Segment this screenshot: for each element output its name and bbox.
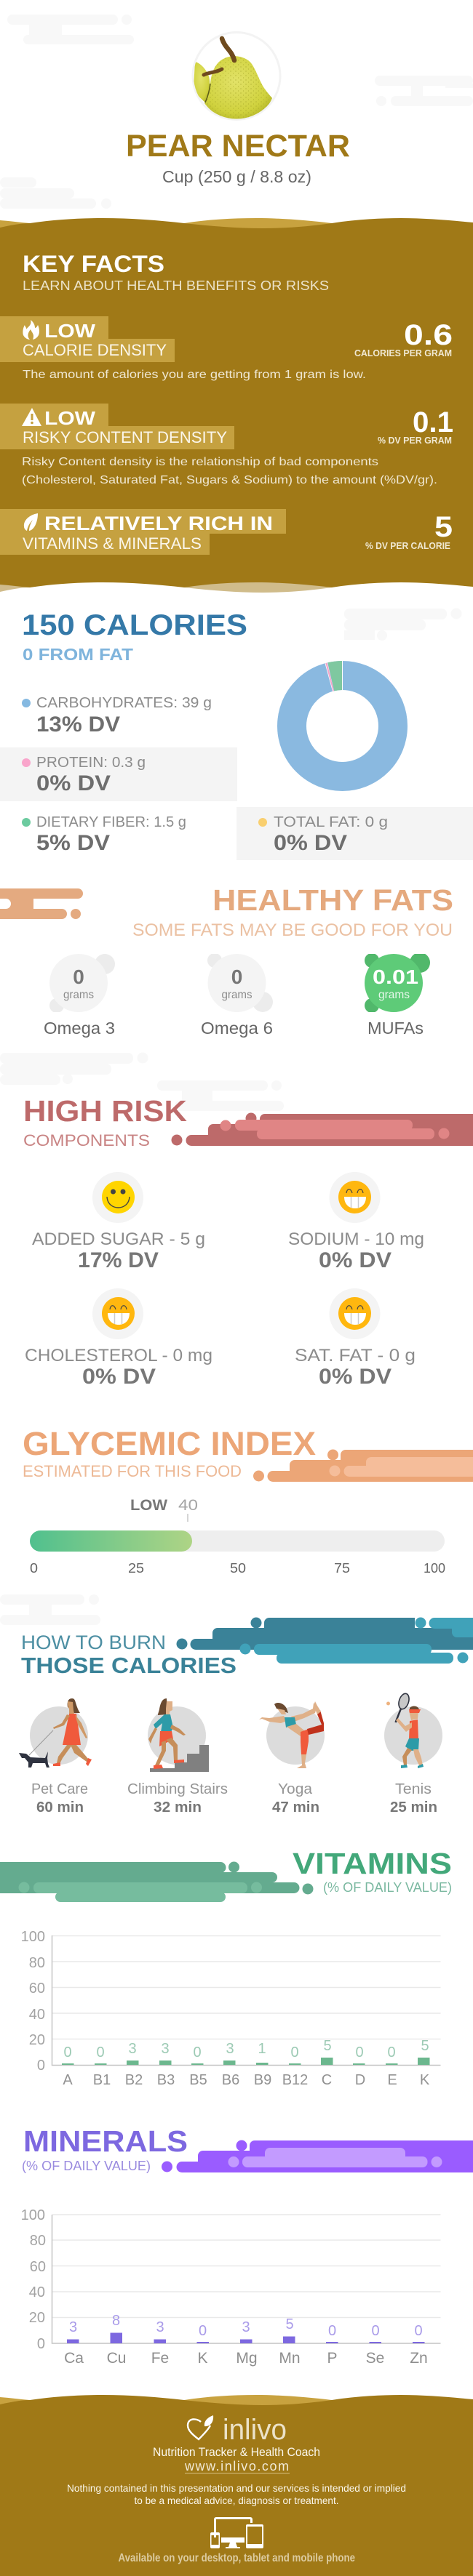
heading line 1: HOW TO BURN	[21, 1632, 166, 1653]
item: carbohydrates: CARBOHYDRATES: 39 g	[36, 695, 212, 711]
bar chart: minerals: Se	[366, 2350, 384, 2367]
bar chart: minerals: Ca	[64, 2350, 84, 2367]
bar chart: minerals: K	[197, 2350, 208, 2367]
panel: high risk components	[23, 1094, 473, 1389]
bar chart: vitamins: K	[420, 2072, 430, 2088]
food photo: pear	[193, 32, 280, 119]
heading line 2: THOSE CALORIES	[21, 1653, 236, 1678]
gauge: low 40	[30, 1497, 445, 1576]
item: omega 6	[201, 953, 273, 1038]
bar chart: vitamins: B3	[157, 2072, 175, 2088]
item: mufas: 0.01	[373, 966, 418, 988]
item: saturated fat	[295, 1288, 416, 1389]
tagline: Nutrition Tracker & Health Coach	[153, 2445, 320, 2459]
item: protein: 0% DV	[36, 771, 111, 795]
value: 0.6 calories per gram: CALORIES PER GRAM	[354, 348, 452, 358]
ornament: red bars	[172, 1112, 473, 1146]
panel: calories	[0, 609, 473, 860]
subheading: (% OF DAILY VALUE)	[22, 2159, 151, 2173]
title: PEAR NECTAR	[126, 129, 350, 164]
donut chart	[292, 661, 393, 777]
fact: calorie density	[0, 316, 453, 381]
bar chart: minerals: P	[327, 2350, 338, 2367]
bar chart: minerals: Mg	[236, 2350, 258, 2367]
fact: vitamins and minerals	[0, 509, 453, 555]
label: low: LOW	[44, 320, 96, 342]
item: omega 6: Omega 6	[201, 1019, 273, 1038]
disclaimer: to be a medical advice, diagnosis or treatment.	[134, 2495, 339, 2506]
bar chart: minerals: Cu	[107, 2350, 126, 2367]
activity: tennis: 25 min	[390, 1799, 437, 1815]
item: saturated fat: SAT. FAT - 0 g	[295, 1346, 416, 1365]
item: carbohydrates	[22, 695, 212, 737]
item: omega 6: 0	[231, 966, 242, 988]
item: added sugar: 17% DV	[78, 1248, 159, 1272]
item: added sugar	[32, 1172, 205, 1272]
bar chart: vitamins: B2	[125, 2072, 143, 2088]
bar chart: minerals: Mn	[279, 2350, 301, 2367]
label: vitamins and minerals: VITAMINS & MINERALS	[23, 534, 202, 553]
subheading: SOME FATS MAY BE GOOD FOR YOU	[132, 920, 453, 940]
heading: healthy fats: HEALTHY FATS	[212, 883, 453, 917]
bar chart: minerals: 0	[371, 2323, 380, 2339]
gauge: low 40: 50	[230, 1561, 246, 1576]
website link: www.inlivo.com	[184, 2459, 289, 2473]
bar chart: vitamins: B6	[222, 2072, 239, 2088]
bar chart: minerals: 3	[69, 2319, 77, 2335]
icon: smile emoji	[102, 1181, 135, 1213]
bar chart: vitamins: 40	[29, 2007, 45, 2023]
logo: inlivo	[188, 2414, 287, 2446]
item: dietary fiber	[22, 814, 186, 855]
gauge: low 40: 0	[30, 1561, 38, 1576]
activity: climbing stairs	[127, 1698, 228, 1815]
label: risky content density: RISKY CONTENT DENSITY	[23, 428, 227, 446]
value: 0.6 calories per gram: 0.6	[404, 319, 453, 351]
icon: warning	[22, 408, 41, 426]
item: omega 3	[44, 954, 115, 1038]
value: 0.1 percent dv per gram: % DV PER GRAM	[378, 435, 452, 446]
heading: key facts: KEY FACTS	[23, 251, 164, 277]
item: omega 6: grams	[221, 989, 252, 1001]
bar chart: vitamins: 20	[29, 2032, 45, 2048]
gauge: low 40: 25	[128, 1561, 144, 1576]
item: protein: PROTEIN: 0.3 g	[36, 755, 146, 771]
gauge: low 40: LOW	[130, 1497, 167, 1514]
activity: pet care: Pet Care	[31, 1781, 88, 1797]
fact: risky content density	[0, 404, 453, 486]
bar chart: minerals: 60	[30, 2259, 46, 2275]
value: 0.1 percent dv per gram	[378, 406, 453, 446]
serving size: Cup (250 g / 8.8 oz)	[162, 167, 311, 186]
disclaimer	[67, 2482, 406, 2506]
activity: climbing stairs: Climbing Stairs	[127, 1781, 228, 1797]
icon: woman in yoga pose	[259, 1701, 324, 1768]
bar chart: vitamins: D	[355, 2072, 365, 2088]
bar chart: vitamins: 0	[355, 2045, 364, 2061]
bar chart: minerals: 0	[199, 2323, 207, 2339]
bar chart: minerals	[21, 2207, 441, 2367]
bar chart: minerals: 0	[37, 2336, 45, 2352]
ornament: orange bars	[0, 888, 83, 919]
bar chart: minerals: 20	[29, 2310, 45, 2326]
description: The amount of calories you are getting from 1 gram is low.	[23, 369, 366, 381]
item: protein	[22, 755, 146, 795]
item: omega 3: Omega 3	[44, 1019, 115, 1038]
bar chart: vitamins: B5	[189, 2072, 207, 2088]
bar chart: minerals: 5	[285, 2316, 294, 2332]
bar chart: vitamins: 80	[29, 1955, 45, 1971]
bar chart: vitamins: 5	[323, 2038, 332, 2054]
item: cholesterol: 0% DV	[82, 1365, 156, 1389]
icon: devices	[210, 2517, 263, 2548]
ornament: green bars	[0, 1861, 313, 1902]
description	[22, 456, 437, 486]
item: sodium: 0% DV	[319, 1248, 391, 1272]
row backgrounds	[0, 747, 473, 860]
bar chart: vitamins: 3	[226, 2041, 234, 2057]
heading: 150 calories: 150 CALORIES	[22, 609, 247, 641]
bar chart: minerals: Fe	[151, 2350, 169, 2367]
activity: yoga	[259, 1701, 325, 1815]
item: carbohydrates: 13% DV	[36, 713, 120, 737]
activity: yoga: Yoga	[278, 1781, 313, 1797]
disclaimer: Nothing contained in this presentation and our services is intended or implied	[67, 2482, 406, 2494]
panel: glycemic index	[23, 1425, 473, 1576]
panel: how to burn those calories	[19, 1617, 473, 1815]
heading: glycemic index: GLYCEMIC INDEX	[23, 1425, 316, 1462]
item: mufas: grams	[378, 989, 410, 1001]
item: mufas	[365, 952, 430, 1038]
value: 5 percent dv per calorie	[365, 511, 453, 551]
bar chart: minerals: 0	[328, 2323, 336, 2339]
icon: grin emoji	[102, 1297, 135, 1330]
panel: footer	[0, 2395, 473, 2576]
gauge: low 40: 75	[334, 1561, 350, 1576]
bar chart: minerals: 100	[21, 2207, 45, 2223]
bar chart: minerals: 8	[112, 2313, 120, 2329]
bar chart: minerals: 3	[156, 2319, 164, 2335]
bar chart: vitamins: 3	[161, 2041, 170, 2057]
description: Risky Content density is the relationship of bad components	[22, 456, 378, 468]
ornament: purple bars	[162, 2140, 473, 2172]
bar chart: vitamins: B9	[254, 2072, 271, 2088]
item: omega 3: grams	[63, 989, 94, 1001]
subheading: components: COMPONENTS	[23, 1131, 150, 1149]
activity: tennis: Tenis	[395, 1781, 432, 1797]
bar chart: vitamins: C	[322, 2072, 332, 2088]
item: total fat: 0% DV	[274, 831, 347, 855]
bar chart: vitamins: 100	[21, 1929, 45, 1945]
heading: high risk: HIGH RISK	[23, 1094, 187, 1128]
item: added sugar: ADDED SUGAR - 5 g	[32, 1229, 205, 1249]
item: total fat: TOTAL FAT: 0 g	[274, 814, 388, 830]
item: sodium: SODIUM - 10 mg	[288, 1229, 424, 1249]
icon: tennis player	[386, 1693, 424, 1768]
bar chart: vitamins: 0	[96, 2045, 105, 2061]
icon: flame	[23, 320, 39, 340]
panel: vitamins	[0, 1847, 452, 2088]
item: total fat	[258, 814, 388, 855]
subheading: from fat: 0 FROM FAT	[23, 645, 133, 664]
activity: yoga: 47 min	[272, 1799, 319, 1815]
heading: vitamins: VITAMINS	[293, 1847, 452, 1880]
item: cholesterol: CHOLESTEROL - 0 mg	[25, 1346, 212, 1365]
icon: woman climbing stairs	[148, 1698, 209, 1772]
activity: pet care: 60 min	[36, 1799, 84, 1815]
item: omega 3: 0	[73, 966, 84, 988]
bar chart: minerals: 80	[30, 2233, 46, 2249]
item: dietary fiber: 5% DV	[36, 831, 110, 855]
panel: minerals	[21, 2124, 473, 2367]
label: low: LOW	[44, 407, 96, 429]
subheading: (% OF DAILY VALUE)	[323, 1880, 452, 1895]
bar chart: vitamins: 1	[258, 2041, 266, 2057]
label: relatively rich in: RELATIVELY RICH IN	[44, 513, 273, 534]
icon: grin emoji	[338, 1181, 371, 1213]
icon: leaf	[24, 513, 38, 531]
panel: healthy fats	[0, 883, 453, 1038]
ornament: orange bars	[253, 1450, 473, 1482]
bar chart: vitamins: 0	[290, 2045, 299, 2061]
description: (Cholesterol, Saturated Fat, Sugars & Sodium) to the amount (%DV/gr).	[22, 474, 437, 486]
bar chart: vitamins: 0	[37, 2058, 45, 2074]
activity: pet care	[19, 1698, 92, 1815]
bar chart: minerals: 0	[414, 2323, 423, 2339]
heading: minerals: MINERALS	[23, 2124, 188, 2158]
gauge: low 40: 100	[424, 1561, 445, 1576]
bar chart: vitamins: 60	[29, 1981, 45, 1997]
bar chart: vitamins: B1	[93, 2072, 111, 2088]
icon: grin emoji	[338, 1297, 371, 1330]
activity: climbing stairs: 32 min	[154, 1799, 202, 1815]
bar chart: minerals: 40	[29, 2284, 45, 2300]
bar chart: vitamins	[21, 1929, 441, 2088]
value: 5 percent dv per calorie: 5	[434, 511, 453, 543]
bar chart: vitamins: E	[387, 2072, 397, 2088]
background cloud shapes	[0, 15, 473, 1625]
availability note: Available on your desktop, tablet and mobile phone	[118, 2552, 355, 2564]
panel: key facts	[0, 218, 473, 594]
label: calorie density: CALORIE DENSITY	[23, 341, 167, 359]
item: cholesterol	[25, 1288, 212, 1389]
item: dietary fiber: DIETARY FIBER: 1.5 g	[36, 814, 186, 830]
bar chart: vitamins: 3	[128, 2041, 137, 2057]
value: 0.6 calories per gram	[354, 319, 453, 358]
bar chart: minerals: 3	[242, 2319, 250, 2335]
item: saturated fat: 0% DV	[319, 1365, 391, 1389]
item: mufas: MUFAs	[367, 1019, 424, 1038]
subheading: ESTIMATED FOR THIS FOOD	[23, 1462, 242, 1480]
value: 0.1 percent dv per gram: 0.1	[413, 406, 453, 438]
bar chart: vitamins: A	[63, 2072, 73, 2088]
logo: inlivo: inlivo	[223, 2414, 287, 2446]
gauge: low 40: 40	[178, 1497, 198, 1514]
value: 5 percent dv per calorie: % DV PER CALORIE	[365, 540, 450, 551]
subheading: key facts: LEARN ABOUT HEALTH BENEFITS OR RISKS	[23, 278, 329, 293]
bar chart: vitamins: 0	[193, 2045, 202, 2061]
bar chart: vitamins: B12	[282, 2072, 308, 2088]
icon: woman walking dog	[19, 1698, 92, 1768]
bar chart: vitamins: 0	[387, 2045, 396, 2061]
activity: tennis	[384, 1693, 442, 1815]
bar chart: minerals: Zn	[410, 2350, 428, 2367]
item: sodium	[288, 1172, 424, 1272]
bar chart: vitamins: 5	[421, 2038, 429, 2054]
ornament: teal bars	[176, 1617, 473, 1664]
bar chart: vitamins: 0	[63, 2045, 72, 2061]
